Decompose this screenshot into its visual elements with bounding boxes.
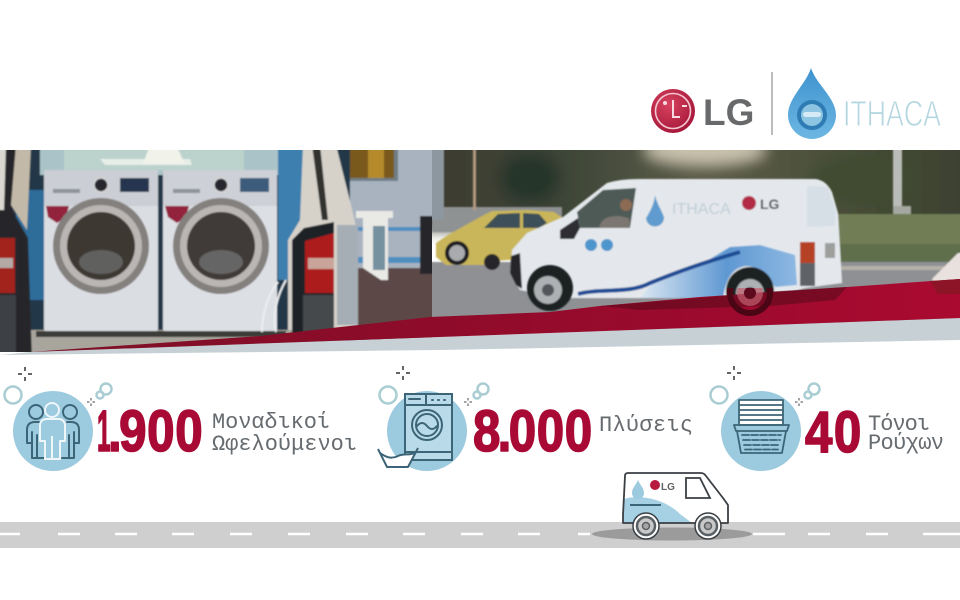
infographic canvas [0, 68, 960, 548]
logo: ITHACA [788, 68, 941, 139]
van door right [262, 145, 358, 337]
icon: van front wheel [527, 265, 573, 311]
icon: laundry basket [734, 400, 789, 453]
stat: washes [378, 366, 693, 471]
label: unique beneficiaries [212, 410, 357, 457]
icon: washing machine and basin [378, 394, 452, 467]
stat: beneficiaries [4, 367, 357, 471]
icon: people [27, 403, 79, 459]
label: tonnes of clothes [868, 412, 944, 456]
decorative bubbles [710, 366, 820, 406]
icon: van illustration [592, 473, 752, 540]
decorative bubbles [4, 367, 112, 406]
number: 40: 40 [805, 400, 861, 465]
stat: tonnes of clothes [710, 366, 944, 471]
header logos [651, 68, 941, 139]
label: tonnes of clothes: Ρούχων [868, 431, 944, 456]
icon: van illustration: LG [661, 482, 675, 493]
yellow car [436, 210, 566, 270]
logo: LG [651, 89, 754, 133]
decorative bubbles [380, 366, 488, 406]
photo: washing machines in van [0, 145, 437, 360]
washing machine left [44, 170, 158, 331]
washing machine right [163, 170, 277, 331]
white van: LG [760, 196, 780, 212]
label: washes: Πλύσεις [599, 413, 693, 438]
label: unique beneficiaries: Μοναδικοί [212, 410, 330, 435]
van door left [0, 145, 32, 358]
white van [509, 178, 843, 299]
logo: LG: LG [703, 92, 754, 133]
white van: ITHACA [672, 201, 731, 218]
number: 1.900: 1 [97, 400, 111, 464]
number: 1.900: .900 [108, 399, 203, 464]
diagonal red and grey bands [0, 273, 960, 355]
number: 8.000: 8.000 [473, 399, 592, 464]
photo: van on street [432, 150, 960, 330]
label: unique beneficiaries: Ωφελούμενοι [212, 432, 357, 457]
road [0, 522, 960, 548]
label: tonnes of clothes: Τόνοι [868, 412, 930, 437]
